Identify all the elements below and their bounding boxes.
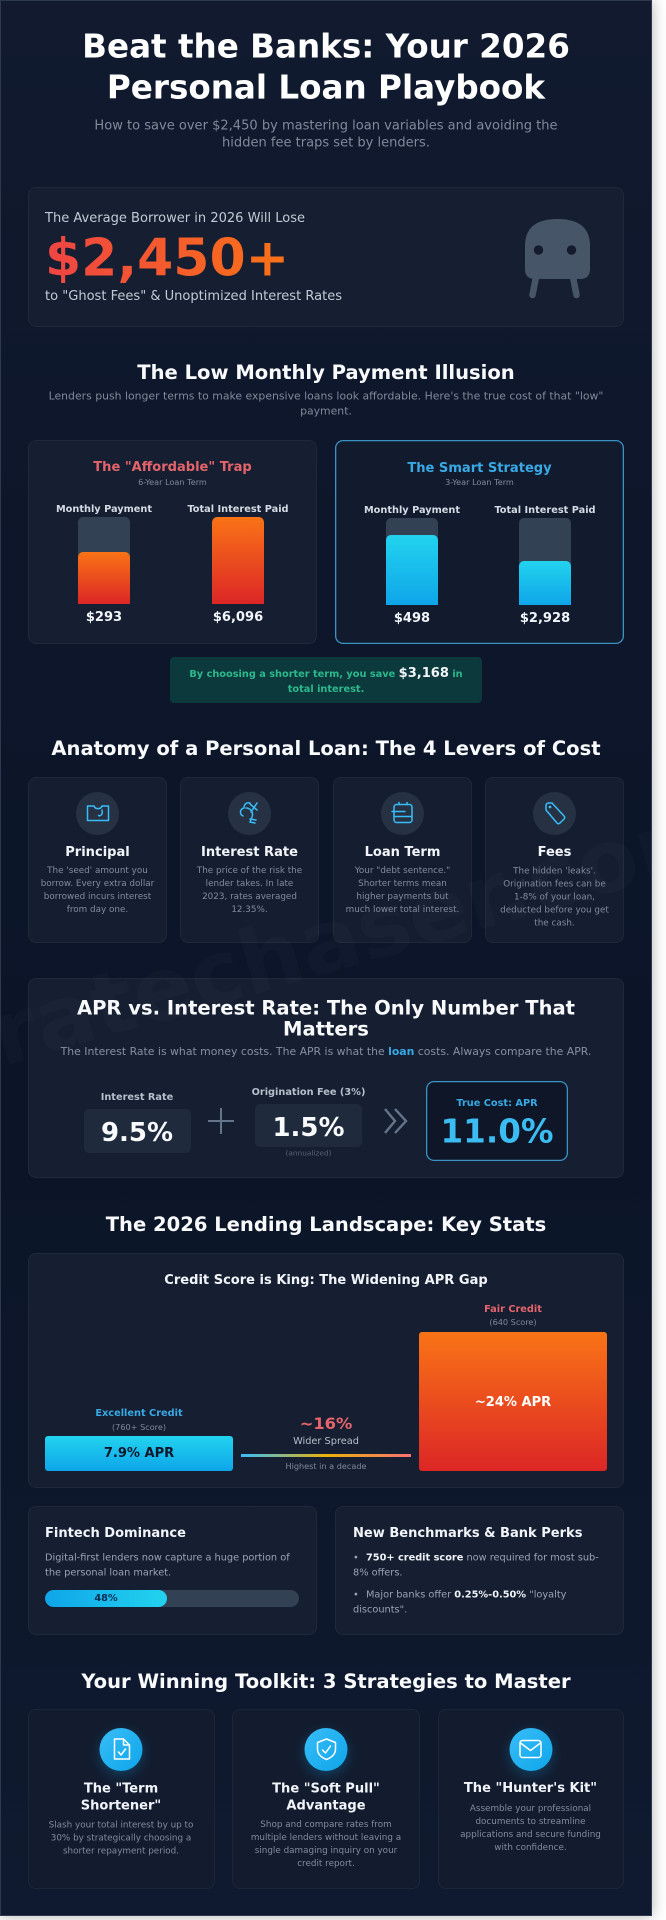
spread value: ~16% xyxy=(300,1414,352,1433)
value box xyxy=(84,1109,191,1153)
card text: the cash. xyxy=(534,918,575,928)
callout text: By choosing a shorter term, you save $3,168 in xyxy=(189,666,463,680)
bullet two: • xyxy=(353,1590,359,1601)
card text xyxy=(196,866,302,915)
card text xyxy=(49,1820,193,1856)
card text: documents to streamline xyxy=(475,1816,586,1826)
icon: envelope xyxy=(509,1728,552,1770)
bullet one: 8% offers. xyxy=(353,1568,403,1579)
value box xyxy=(255,1104,362,1147)
description xyxy=(49,389,603,418)
equation: origination fee xyxy=(252,1087,365,1157)
icon: shield check xyxy=(304,1728,348,1770)
panel title: Fintech Dominance xyxy=(45,1526,186,1541)
label: Excellent Credit xyxy=(95,1408,183,1419)
icon: ghost xyxy=(525,219,590,298)
card text: Origination fees can be xyxy=(503,879,606,889)
bullet two: discounts". xyxy=(353,1605,407,1616)
panel title: The Smart Strategy xyxy=(407,460,552,475)
card: hunter's kit xyxy=(438,1709,624,1889)
subtitle: hidden fee traps set by lenders. xyxy=(222,136,430,150)
card text: from day one. xyxy=(67,905,128,915)
card text: much lower total interest. xyxy=(346,905,459,915)
bar graphic xyxy=(419,1332,607,1471)
callout: savings xyxy=(170,657,482,703)
spread line xyxy=(241,1454,411,1456)
card heading: Advantage xyxy=(286,1798,366,1814)
value: 1.5% xyxy=(272,1112,345,1142)
card text: multiple lenders without leaving a xyxy=(251,1833,401,1843)
icon: wallet xyxy=(76,792,119,834)
heading: key stats: The 2026 Lending Landscape: Key Stats xyxy=(106,1213,546,1236)
card text: Shop and compare rates from xyxy=(260,1820,392,1830)
bar: excellent credit xyxy=(45,1408,233,1471)
panel: affordable trap xyxy=(28,440,317,644)
progress bar xyxy=(45,1590,299,1607)
card text xyxy=(251,1820,401,1869)
panel: benchmarks and perks xyxy=(335,1506,624,1635)
value: 9.5% xyxy=(101,1118,173,1148)
label: Monthly Payment xyxy=(56,504,152,515)
icon: plus xyxy=(208,1108,234,1134)
icon: document check xyxy=(100,1728,142,1770)
label: Origination Fee (3%) xyxy=(252,1087,365,1098)
bar: monthly payment xyxy=(56,504,152,625)
icon: chevrons xyxy=(384,1108,408,1134)
panel subtitle: 6-Year Loan Term xyxy=(138,476,207,486)
callout text xyxy=(189,666,463,695)
subtitle: How to save over $2,450 by mastering loan variables and avoiding the xyxy=(94,118,558,133)
panel title: New Benchmarks & Bank Perks xyxy=(353,1526,582,1541)
bullet two xyxy=(353,1590,566,1616)
value: $498 xyxy=(394,610,430,625)
bar graphic xyxy=(45,1436,233,1471)
bar: total interest xyxy=(187,504,289,625)
icon: calendar xyxy=(381,792,424,834)
note: (annualized) xyxy=(285,1148,332,1157)
card text: Assemble your professional xyxy=(470,1804,591,1814)
card heading: Interest Rate xyxy=(201,845,298,860)
card text: single damaging inquiry on your xyxy=(255,1846,397,1856)
spread label: Wider Spread xyxy=(293,1436,359,1447)
panel title: The "Affordable" Trap xyxy=(93,460,252,475)
card text: The hidden 'leaks'. xyxy=(513,866,596,876)
value: 7.9% APR xyxy=(104,1446,174,1461)
bar: monthly payment xyxy=(364,504,460,625)
card text: 30% by strategically choosing a xyxy=(51,1833,191,1843)
card heading: Loan Term xyxy=(365,845,440,860)
label: Total Interest Paid xyxy=(494,504,596,515)
bullet one: • xyxy=(353,1553,359,1564)
card text: The price of the risk the xyxy=(197,866,302,876)
value: ~24% APR xyxy=(475,1395,551,1410)
card text xyxy=(41,866,154,915)
bullet one: 750+ credit score now required for most sub- xyxy=(366,1553,599,1564)
bullet two: Major banks offer 0.25%-0.50% "loyalty xyxy=(366,1590,566,1601)
card text: Your "debt sentence." xyxy=(355,866,450,876)
header xyxy=(82,28,570,150)
value: $293 xyxy=(86,610,122,625)
card heading: Fees xyxy=(538,845,571,860)
subtitle xyxy=(94,118,558,150)
card text: Slash your total interest by up to xyxy=(49,1820,193,1830)
label: Total Interest Paid xyxy=(187,504,289,515)
card: principal xyxy=(28,777,167,943)
label: Interest Rate xyxy=(101,1092,173,1103)
card heading: Shortener" xyxy=(81,1798,161,1814)
panel text: Digital-first lenders now capture a huge portion of xyxy=(45,1553,290,1564)
card text: 2023, rates averaged xyxy=(202,892,297,902)
panel text xyxy=(45,1553,290,1579)
description: The Interest Rate is what money costs. The APR is what the loan costs. Always compare the APR. xyxy=(61,1045,591,1058)
panel: APR vs interest rate xyxy=(28,978,624,1178)
card text: Shorter terms mean xyxy=(358,879,447,889)
hero intro text: The Average Borrower in 2026 Will Lose xyxy=(45,211,305,226)
heading: toolkit: Your Winning Toolkit: 3 Strategies to Master xyxy=(81,1670,571,1693)
panel: smart strategy xyxy=(335,440,624,644)
icon: tag xyxy=(533,792,576,834)
description: payment. xyxy=(300,404,352,418)
chart title: Credit Score is King: The Widening APR Gap xyxy=(164,1273,488,1288)
bar: total interest xyxy=(494,504,596,625)
card text: shorter repayment period. xyxy=(63,1846,179,1856)
title: Personal Loan Playbook xyxy=(107,68,545,106)
card text: borrowed incurs interest xyxy=(44,892,151,902)
panel: average borrower loss xyxy=(28,187,624,327)
bar graphic xyxy=(212,517,264,604)
heading: APR vs. Interest Rate: The Only Number That xyxy=(77,996,575,1019)
card text: The 'seed' amount you xyxy=(47,866,148,876)
heading: four levers: Anatomy of a Personal Loan: The 4 Levers of Cost xyxy=(51,737,601,760)
progress value: 48% xyxy=(94,1592,118,1603)
card text: deducted before you get xyxy=(500,905,609,915)
label: Monthly Payment xyxy=(364,504,460,515)
title xyxy=(82,28,570,106)
card text xyxy=(460,1804,601,1852)
icon: rate xyxy=(228,792,271,834)
card text: credit report. xyxy=(297,1859,355,1869)
bar: fair credit xyxy=(419,1303,607,1471)
card text: 1-8% of your loan, xyxy=(514,892,595,902)
bar graphic xyxy=(386,518,438,604)
card: loan term xyxy=(333,777,472,943)
card text: applications and secure funding xyxy=(460,1830,601,1840)
heading xyxy=(77,996,575,1040)
card text: higher payments but xyxy=(356,892,449,902)
bar graphic xyxy=(519,518,571,604)
panel: credit score chart xyxy=(28,1253,624,1488)
card text: lender takes. In late xyxy=(206,879,293,889)
card: soft pull xyxy=(232,1709,420,1889)
equation: interest rate xyxy=(84,1092,191,1153)
spread indicator xyxy=(241,1414,411,1471)
card heading: The "Soft Pull" xyxy=(272,1781,380,1796)
card heading: Principal xyxy=(65,845,130,860)
description: Lenders push longer terms to make expensive loans look affordable. Here's the true cost of that "low" xyxy=(49,389,603,402)
bar graphic xyxy=(78,517,130,604)
card heading: The "Hunter's Kit" xyxy=(464,1781,597,1796)
card text xyxy=(346,866,459,915)
card heading xyxy=(272,1781,380,1814)
panel: fintech dominance xyxy=(28,1506,317,1635)
bullet one xyxy=(353,1553,599,1579)
panel subtitle: 3-Year Loan Term xyxy=(445,477,514,487)
card heading: The "Term xyxy=(84,1781,158,1796)
spread note: Highest in a decade xyxy=(286,1461,366,1471)
result box: true cost APR xyxy=(426,1081,568,1161)
heading: Matters xyxy=(283,1018,369,1040)
value: 11.0% xyxy=(440,1113,554,1151)
card: term shortener xyxy=(28,1709,214,1889)
title: Beat the Banks: Your 2026 xyxy=(82,28,570,66)
value: $6,096 xyxy=(213,610,263,625)
heading: The Low Monthly Payment Illusion xyxy=(137,361,515,384)
card text: borrow. Every extra dollar xyxy=(41,879,154,889)
value: $2,928 xyxy=(520,610,570,625)
card: interest rate xyxy=(180,777,319,943)
section heading: illusion xyxy=(49,361,603,418)
card text: 12.35%. xyxy=(231,905,268,915)
callout text: total interest. xyxy=(288,684,364,695)
label: Fair Credit xyxy=(484,1303,542,1314)
score: (640 Score) xyxy=(489,1317,537,1327)
progress fill xyxy=(45,1590,167,1607)
card text xyxy=(500,866,609,928)
panel text: the personal loan market. xyxy=(45,1568,171,1579)
label: True Cost: APR xyxy=(456,1098,538,1109)
card: fees xyxy=(485,777,624,943)
score: (760+ Score) xyxy=(112,1422,166,1432)
hero caption: to "Ghost Fees" & Unoptimized Interest Rates xyxy=(45,289,342,304)
card heading xyxy=(81,1781,161,1814)
hero number: $2,450+ xyxy=(45,228,289,288)
card text: with confidence. xyxy=(494,1842,567,1852)
